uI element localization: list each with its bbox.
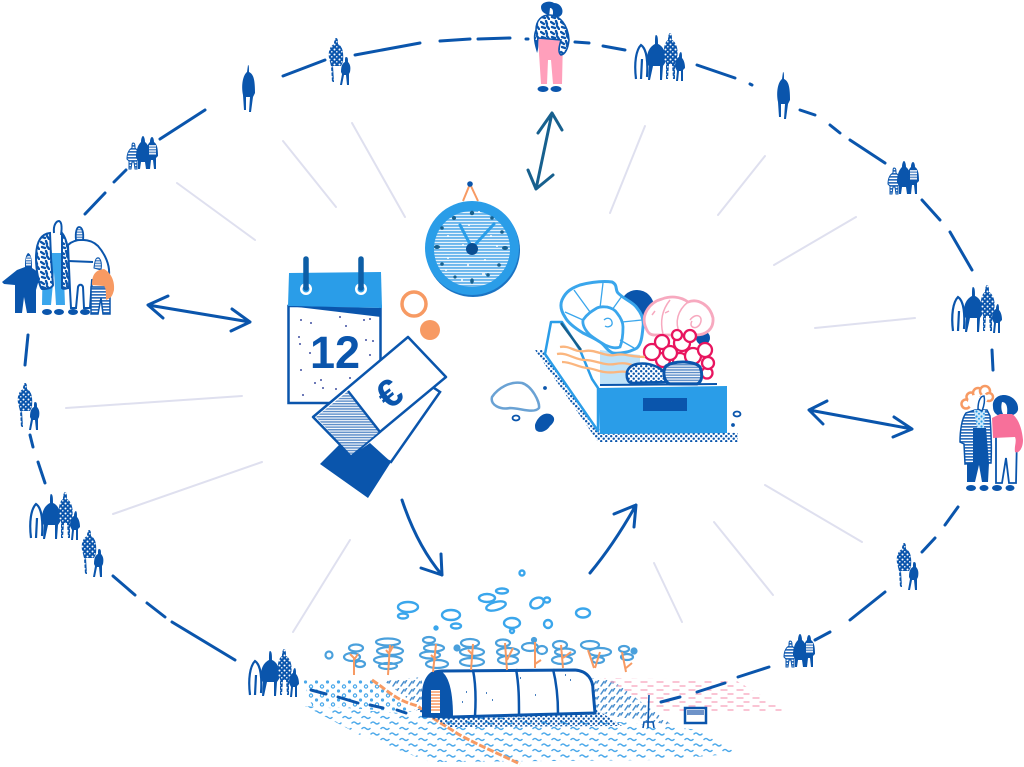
small group: lower left xyxy=(30,492,80,540)
feet xyxy=(966,485,1014,491)
box left wall xyxy=(545,322,598,431)
clock face xyxy=(434,211,510,287)
pitchfork xyxy=(643,695,654,728)
box handle slot xyxy=(643,398,687,411)
arrow: family to calendar xyxy=(148,296,250,331)
dark child xyxy=(2,253,47,313)
clock specks xyxy=(445,212,498,280)
bacon waves xyxy=(557,347,645,376)
dark child head xyxy=(26,256,31,266)
field landscape xyxy=(303,677,790,764)
produce box xyxy=(492,282,740,442)
trio: bottom right xyxy=(784,634,815,667)
people: family at left xyxy=(2,221,114,315)
small child legs xyxy=(91,287,110,314)
trunks xyxy=(350,642,632,675)
back note xyxy=(342,372,440,462)
blue furrows xyxy=(305,706,742,762)
left bubble field xyxy=(303,680,412,712)
binder rings xyxy=(300,283,367,295)
greenhouse ribs xyxy=(473,669,558,716)
coin outline xyxy=(402,292,426,316)
face xyxy=(549,8,553,17)
orange path xyxy=(372,680,520,764)
pink field xyxy=(604,678,790,712)
trio: upper left xyxy=(127,136,158,169)
radiating spokes xyxy=(66,123,915,632)
box inner edge xyxy=(561,323,581,350)
feet xyxy=(538,86,562,92)
dotted shadow xyxy=(535,350,738,442)
clock case shadow xyxy=(426,203,520,297)
shell centre xyxy=(583,307,623,348)
greenhouse xyxy=(422,669,595,717)
hair xyxy=(541,2,563,18)
arrow: farm up to food xyxy=(590,505,636,573)
pair: lower right xyxy=(897,543,918,590)
dotted potato xyxy=(627,364,666,383)
greenhouse body xyxy=(424,670,595,717)
greenhouse speckles xyxy=(462,675,571,702)
front note xyxy=(313,337,446,456)
greenhouse dark end arch xyxy=(422,670,453,717)
arrow: person to clock xyxy=(528,113,562,189)
people: couple at right xyxy=(960,386,1023,491)
calendar xyxy=(288,259,382,403)
back note dark end xyxy=(320,443,391,498)
big person head xyxy=(76,227,83,240)
small crate xyxy=(685,708,706,723)
clock marks xyxy=(434,211,508,284)
slanted crop right xyxy=(592,678,672,725)
box inner xyxy=(600,350,640,385)
small child head xyxy=(94,258,101,270)
man's head xyxy=(978,396,984,411)
small group: right xyxy=(952,285,1002,333)
man's scarf xyxy=(974,410,985,428)
orange top xyxy=(92,269,114,300)
pebbles xyxy=(512,387,740,426)
pair: lower left xyxy=(82,530,103,577)
clock case xyxy=(425,201,519,295)
dark stone xyxy=(535,414,554,432)
dotted ground under greenhouse xyxy=(414,709,622,727)
hanger xyxy=(463,184,478,201)
arrow: money down to farm xyxy=(402,500,442,575)
arrow: couple to box xyxy=(809,401,912,437)
banknotes xyxy=(313,337,446,498)
small group: bottom left field xyxy=(249,649,299,697)
clock hands xyxy=(460,224,494,248)
striped potato xyxy=(664,362,702,384)
page speckle xyxy=(298,317,374,395)
orchard trees xyxy=(326,570,636,675)
front note striped end xyxy=(316,392,379,455)
patterned top xyxy=(535,15,569,55)
calendar page xyxy=(288,306,380,403)
people: woman at top xyxy=(535,2,569,92)
pink trousers xyxy=(538,38,563,84)
woman's hair xyxy=(993,395,1018,416)
pair: top left xyxy=(329,38,350,85)
slanted crop left xyxy=(384,677,422,702)
dark produce behind xyxy=(620,290,654,324)
single figure: upper left xyxy=(242,65,255,112)
arm xyxy=(68,261,93,262)
box inner dark rim xyxy=(600,384,717,385)
orange door stripes xyxy=(431,692,440,710)
euro sign: € xyxy=(368,371,412,418)
patterned coat xyxy=(36,233,69,289)
small group: top right xyxy=(635,33,685,81)
feet xyxy=(42,309,90,315)
woman's trousers xyxy=(996,436,1017,483)
pink rolls xyxy=(644,297,713,335)
single figure: upper right xyxy=(777,72,790,119)
man's legs xyxy=(967,428,989,482)
shell xyxy=(561,282,643,353)
floating clouds xyxy=(398,570,590,633)
greenhouse door xyxy=(431,690,440,713)
outlined stone xyxy=(492,383,539,411)
big person body xyxy=(68,240,109,308)
jeans xyxy=(42,250,65,305)
calendar header xyxy=(288,272,382,308)
shirt xyxy=(50,236,62,253)
orange hair xyxy=(962,386,993,409)
coat person head xyxy=(54,221,62,235)
calendar date: 12 xyxy=(310,327,360,378)
man's coat xyxy=(960,410,991,464)
orange coins xyxy=(402,292,440,340)
foliage xyxy=(326,637,636,669)
woman's face xyxy=(1001,402,1007,414)
fork and crate tools xyxy=(643,695,706,728)
box front xyxy=(598,386,727,434)
shell ribs xyxy=(565,283,642,352)
raspberries xyxy=(644,330,714,378)
clock xyxy=(425,181,520,297)
arrows xyxy=(148,113,912,575)
crate band xyxy=(687,710,704,715)
woman's pink top xyxy=(992,414,1023,452)
page fold xyxy=(289,306,381,317)
trio: upper right xyxy=(888,161,919,194)
coin solid xyxy=(420,320,440,340)
pair: left xyxy=(18,383,39,430)
ring bars xyxy=(306,259,361,288)
